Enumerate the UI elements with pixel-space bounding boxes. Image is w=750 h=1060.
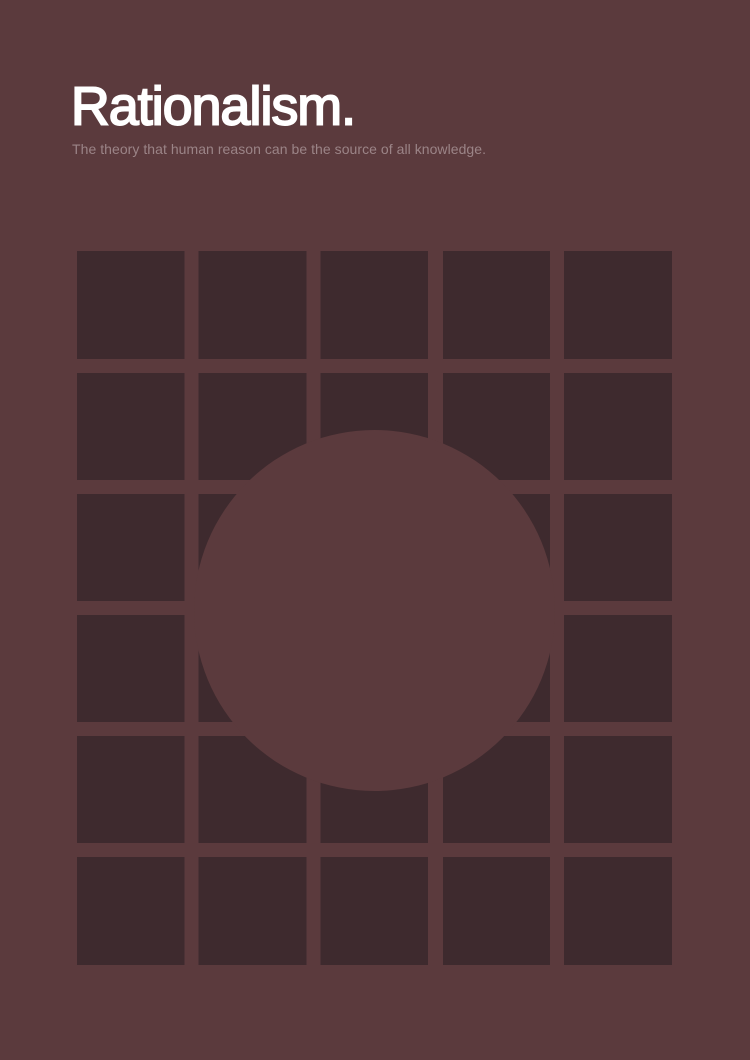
title: Rationalism. <box>71 76 356 136</box>
grid of dark squares <box>77 251 672 965</box>
central circle <box>194 430 555 791</box>
subtitle: The theory that human reason can be the source of all knowledge. <box>72 141 486 157</box>
